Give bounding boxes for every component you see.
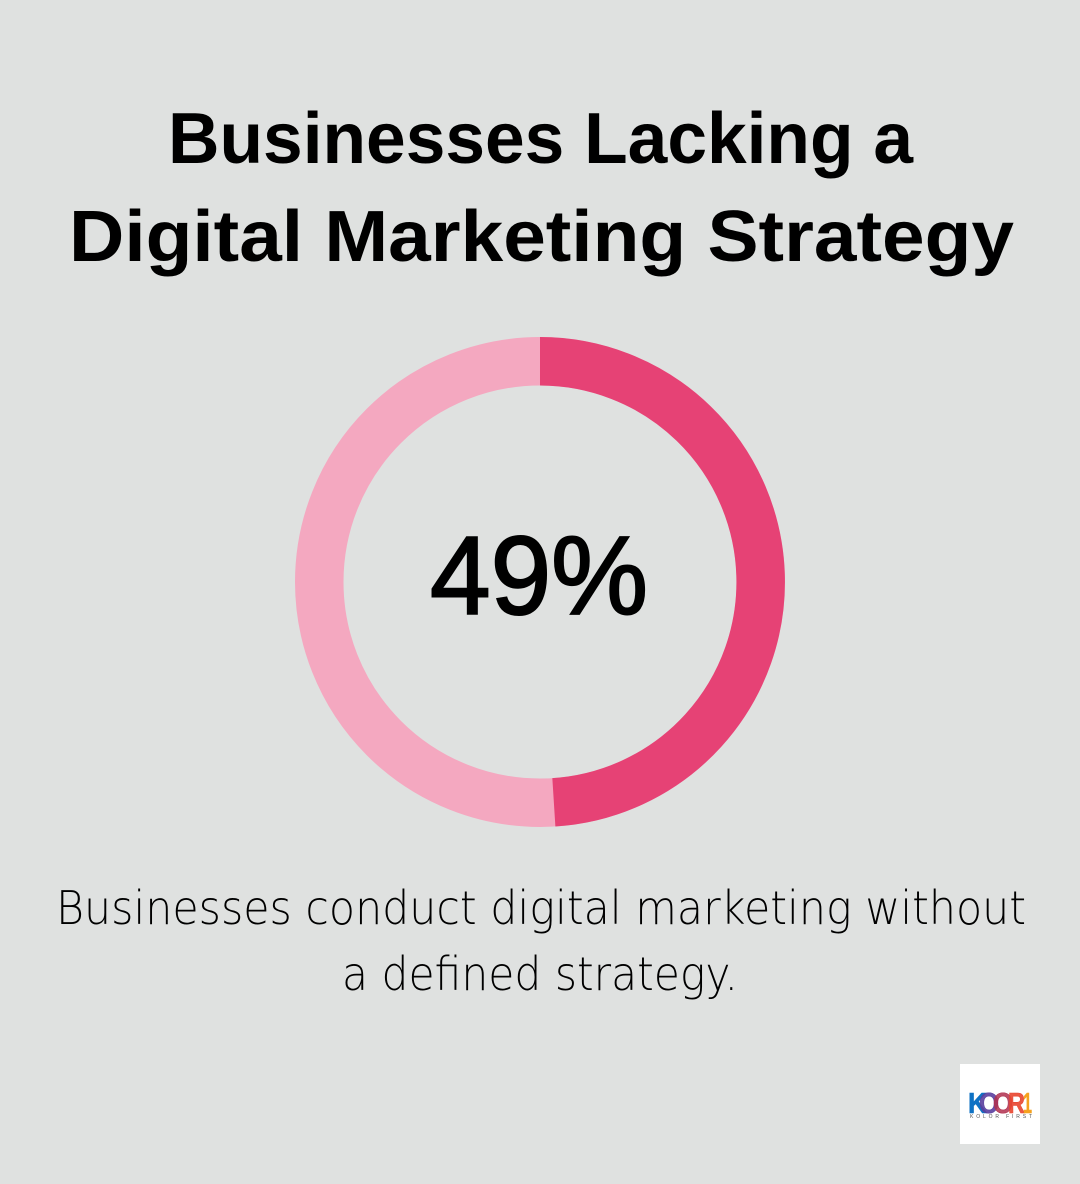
logo wordmark: 1 bbox=[1023, 1088, 1032, 1120]
logo tagline: KOLOR FIRST bbox=[970, 1114, 1032, 1120]
logo wordmark: R bbox=[1008, 1088, 1025, 1120]
title: Businesses Lacking a bbox=[168, 99, 914, 179]
logo wordmark bbox=[968, 1088, 1032, 1120]
ring value 49% bbox=[540, 361, 761, 802]
description: Businesses conduct digital marketing without bbox=[56, 881, 1026, 935]
ring remainder bbox=[319, 361, 761, 803]
description bbox=[56, 881, 1026, 1001]
logo wordmark: K bbox=[968, 1088, 987, 1120]
logo wordmark: O bbox=[993, 1088, 1013, 1120]
logo wordmark: O bbox=[979, 1088, 999, 1120]
donut chart: 49% bbox=[319, 361, 761, 803]
logo: Koori bbox=[960, 1064, 1040, 1144]
title bbox=[69, 99, 1014, 277]
title: Digital Marketing Strategy bbox=[69, 197, 1014, 277]
value label: 49% bbox=[430, 514, 648, 638]
description: a defined strategy. bbox=[342, 947, 738, 1001]
